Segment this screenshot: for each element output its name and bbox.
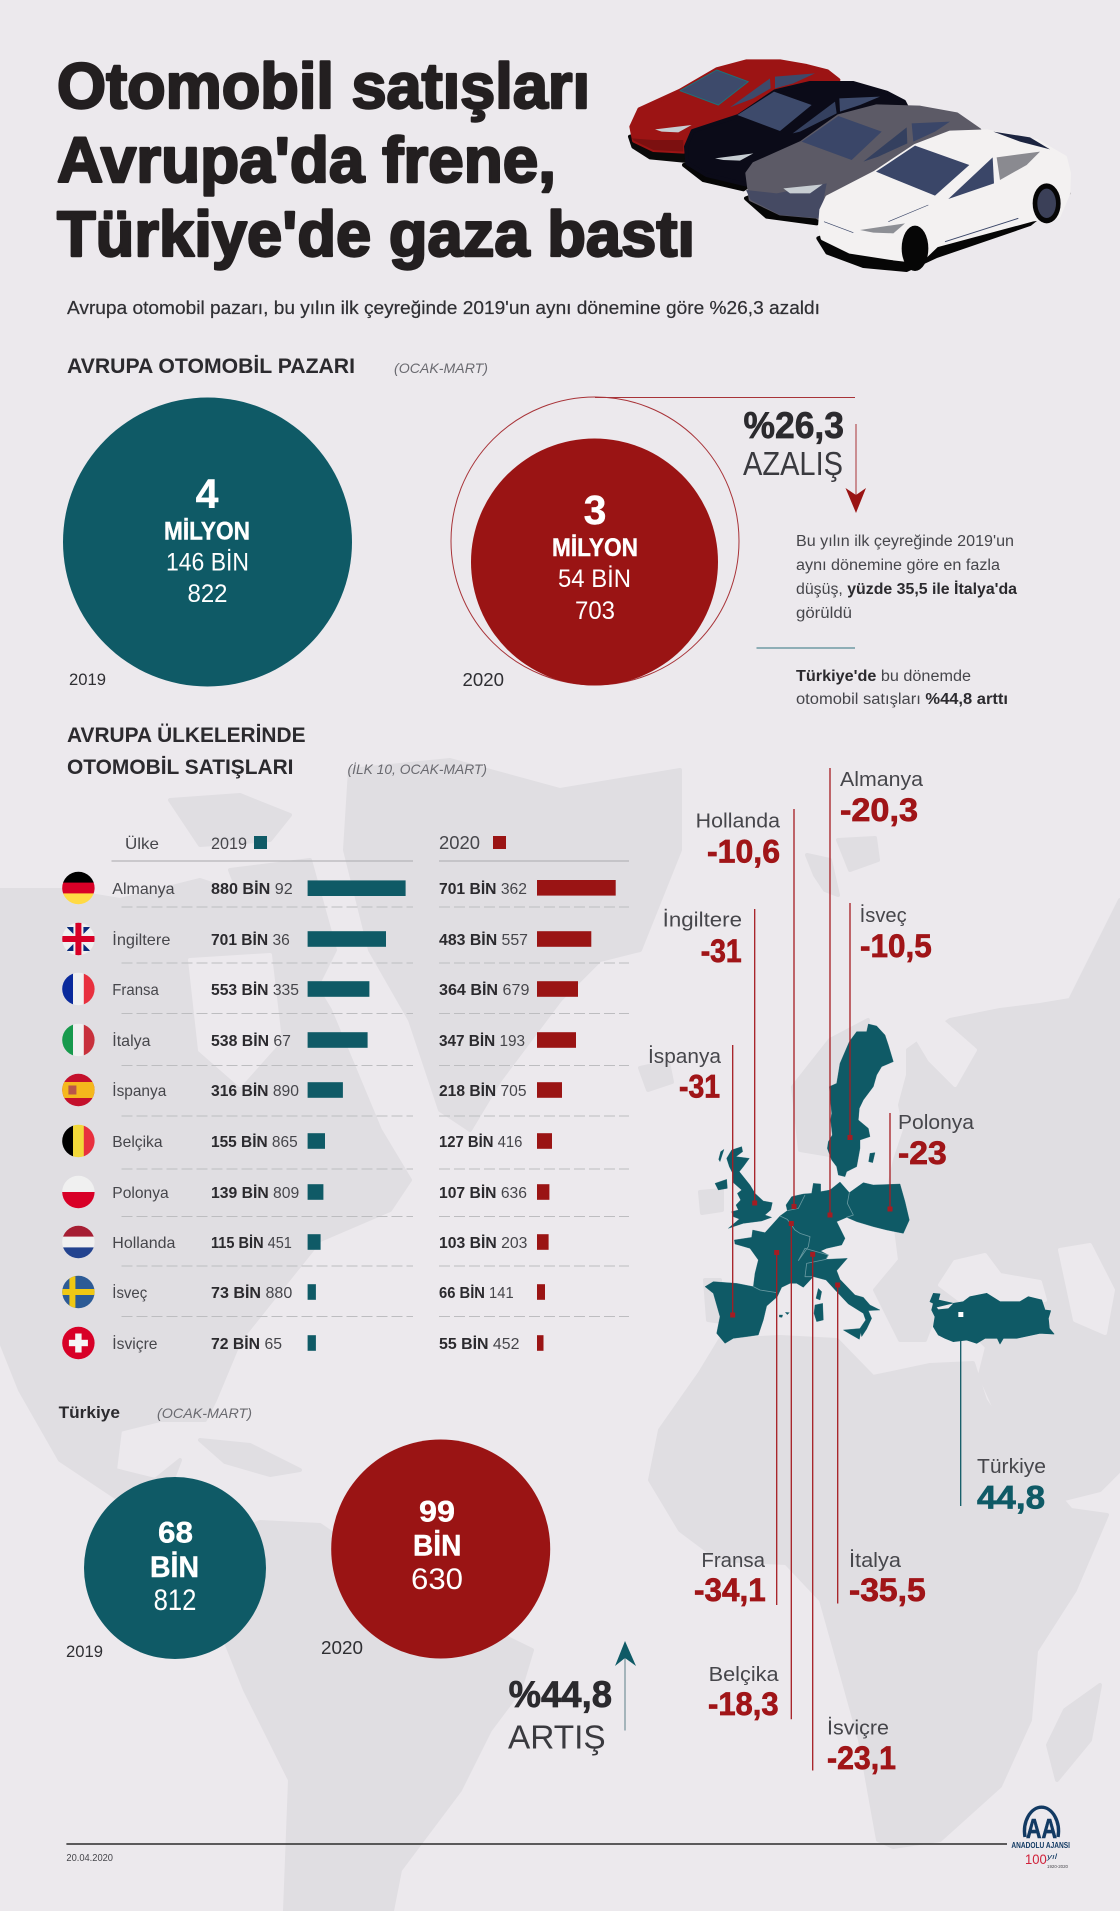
- leader: İngiltere: [752, 909, 757, 1206]
- text block: largest drop: aynı dönemine göre en fazla: [796, 557, 1000, 574]
- row: Fransa: 553 BİN 335: [211, 981, 299, 999]
- table header: 2019: [211, 834, 247, 853]
- heading: European car market: (OCAK-MART): [394, 360, 488, 376]
- callout: 44,8 percent increase: [508, 1674, 612, 1755]
- heading: car sales in European countries: (İLK 10, OCAK-MART): [348, 761, 487, 777]
- text block: largest drop: görüldü: [796, 605, 852, 622]
- icon: flag of Germany: [61, 871, 95, 905]
- circle: Europe 2019: 4: [196, 470, 219, 516]
- text block: largest drop: düşüş, yüzde 35,5 ile İtalya'da: [796, 581, 1017, 598]
- leader: İsveç: [848, 903, 852, 1140]
- map label: Almanya: Almanya: [840, 769, 924, 791]
- row: İspanya: 316 BİN 890: [211, 1082, 299, 1100]
- leader: Almanya: [828, 768, 832, 1218]
- logo: Anadolu Ajansı: ANADOLU AJANSI: [1011, 1840, 1070, 1850]
- map label: İtalya: İtalya: [849, 1549, 902, 1572]
- circle: Türkiye 2020: 630: [411, 1563, 463, 1596]
- leader: Hollanda: [792, 809, 796, 1209]
- row: Hollanda: [61, 1225, 549, 1259]
- label: 2020: 2020: [321, 1638, 363, 1658]
- row: İngiltere: 701 BİN 36: [211, 931, 290, 949]
- leader: Türkiye: [960, 1340, 962, 1506]
- callout: 26,3 percent decrease: AZALIŞ: [743, 445, 843, 482]
- callout: 44,8 percent increase: %44,8: [509, 1674, 612, 1715]
- map label: İtalya: [849, 1549, 926, 1608]
- row: İtalya: [61, 1023, 576, 1057]
- circle: Türkiye 2019: BİN: [150, 1551, 199, 1584]
- map label: Belçika: Belçika: [709, 1664, 780, 1686]
- icon: flag of the United Kingdom: [61, 922, 95, 956]
- map label: Fransa: Fransa: [701, 1550, 766, 1572]
- text block: largest drop: Bu yılın ilk çeyreğinde 2019'un: [796, 533, 1014, 550]
- map label: Türkiye: [977, 1456, 1046, 1516]
- map label: Polonya: -23: [898, 1135, 947, 1171]
- row: Fransa: Fransa: [112, 982, 159, 999]
- circle: Europe 2020 with ring of 2019 size: 703: [575, 597, 615, 625]
- map label: Almanya: [840, 769, 924, 828]
- heading: Türkiye: (OCAK-MART): [157, 1405, 252, 1421]
- callout: 44,8 percent increase: ARTIŞ: [508, 1718, 606, 1755]
- map label: Fransa: [694, 1550, 766, 1608]
- map label: İsviçre: [827, 1716, 896, 1776]
- label: 2020: 2020: [462, 670, 504, 690]
- circle: Europe 2020 with ring of 2019 size: 3: [584, 487, 606, 533]
- row: Fransa: 364 BİN 679: [439, 981, 530, 999]
- icon: flag of Belgium: [61, 1124, 96, 1158]
- row: İspanya: 218 BİN 705: [439, 1082, 527, 1100]
- row: İsviçre: İsviçre: [112, 1334, 158, 1353]
- row: İspanya: [61, 1073, 562, 1107]
- map label: Polonya: Polonya: [898, 1112, 975, 1134]
- heading: car sales in European countries: AVRUPA ÜLKELERİNDE: [67, 724, 306, 747]
- row: İngiltere: 483 BİN 557: [439, 931, 528, 949]
- map label: İspanya: [648, 1045, 722, 1105]
- footer rule and date: 20.04.2020: [66, 1853, 113, 1864]
- icon: flag of Sweden: [61, 1275, 95, 1309]
- circle: Europe 2020 with ring of 2019 size: [451, 397, 739, 686]
- leader lines: countries: [730, 768, 892, 1770]
- row: Polonya: 107 BİN 636: [439, 1184, 527, 1202]
- map label: Hollanda: -10,6: [707, 834, 780, 870]
- map label: İngiltere: [663, 909, 742, 969]
- row: İtalya: İtalya: [112, 1031, 151, 1050]
- label: 2019: 2019: [66, 1642, 103, 1661]
- row: Polonya: Polonya: [112, 1185, 169, 1202]
- circle: Europe 2019: 146 BİN: [166, 548, 249, 576]
- circle: Türkiye 2019: 812: [154, 1584, 196, 1617]
- title: Otomobil satışları: [57, 50, 590, 122]
- circle: Türkiye 2019: 68: [158, 1516, 193, 1550]
- title: Türkiye'de gaza bastı: [57, 198, 695, 270]
- row: İsveç: 66 BİN 141: [439, 1284, 514, 1302]
- circle: Europe 2020 with ring of 2019 size: MİLYON: [552, 534, 638, 562]
- circle: Türkiye 2020: 99: [419, 1496, 455, 1528]
- row: Hollanda: 103 BİN 203: [439, 1234, 527, 1252]
- leader: İsviçre: [810, 1252, 815, 1770]
- row: Polonya: [61, 1175, 549, 1209]
- map label: İspanya: -31: [679, 1069, 720, 1105]
- label: 2019: 2019: [69, 670, 106, 689]
- row: Almanya: [61, 871, 616, 905]
- leader: İspanya: [730, 1045, 735, 1318]
- map label: İtalya: -35,5: [849, 1572, 926, 1608]
- logo: Anadolu Ajansı: AA: [1026, 1813, 1057, 1844]
- leader: Belçika: [789, 1221, 794, 1719]
- row: İspanya: İspanya: [112, 1081, 166, 1100]
- row: Hollanda: 115 BİN 451: [211, 1234, 292, 1252]
- circle: Europe 2019: [63, 398, 352, 686]
- row: Belçika: Belçika: [112, 1134, 163, 1151]
- United Kingdom: [715, 1147, 772, 1228]
- row: Hollanda: Hollanda: [112, 1235, 176, 1252]
- leader: Polonya: [888, 1113, 892, 1212]
- map label: Fransa: -34,1: [694, 1572, 766, 1608]
- leader: İtalya: [835, 1282, 840, 1604]
- mainland: Germany, Poland, Netherlands, Belgium, France, Spain, Switzerland, Italy: [705, 1182, 909, 1343]
- circle: Türkiye 2019: [84, 1477, 266, 1659]
- icon: flag of the Netherlands: [61, 1225, 95, 1259]
- map label: İngiltere: -31: [701, 933, 742, 969]
- red car: [630, 61, 838, 161]
- row: İtalya: 347 BİN 193: [439, 1032, 525, 1050]
- heading: car sales in European countries: OTOMOBİL SATIŞLARI: [67, 756, 294, 779]
- row: İtalya: 538 BİN 67: [211, 1032, 291, 1050]
- text block: Turkey increase: otomobil satışları %44,8 arttı: [796, 691, 1008, 708]
- arrow: decrease: [595, 398, 866, 513]
- heading: car sales in European countries: [67, 724, 487, 779]
- row: İsviçre: 72 BİN 65: [211, 1335, 282, 1353]
- table header: 2020: [439, 833, 480, 853]
- icon: flag of Spain: [61, 1073, 95, 1107]
- row: Belçika: 127 BİN 416: [439, 1133, 522, 1151]
- illustration: four cars: [630, 61, 1069, 271]
- row: Polonya: 139 BİN 809: [211, 1184, 299, 1202]
- map label: İsveç: İsveç: [860, 904, 907, 927]
- row: İsviçre: [61, 1326, 544, 1360]
- map label: Türkiye: 44,8: [977, 1480, 1045, 1516]
- map label: İngiltere: İngiltere: [663, 909, 742, 932]
- arrow: increase: [615, 1641, 636, 1730]
- logo: Anadolu Ajansı: yıl: [1046, 1854, 1058, 1861]
- map label: İsviçre: İsviçre: [827, 1716, 889, 1740]
- map label: İsveç: [860, 904, 932, 964]
- row: İsveç: [61, 1275, 545, 1309]
- subtitle: Avrupa otomobil pazarı, bu yılın ilk çeyreğinde 2019'un aynı dönemine göre %26,3 azaldı: [67, 298, 820, 318]
- map label: Belçika: -18,3: [708, 1686, 779, 1722]
- row: İsviçre: 55 BİN 452: [439, 1335, 520, 1353]
- row: İsveç: 73 BİN 880: [211, 1284, 292, 1302]
- callout: 26,3 percent decrease: %26,3: [744, 405, 844, 446]
- circle: Europe 2019: 822: [188, 580, 228, 608]
- logo: Anadolu Ajansı: 1920-2020: [1047, 1864, 1068, 1869]
- heading: European car market: AVRUPA OTOMOBİL PAZARI: [67, 355, 355, 378]
- logo: Anadolu Ajansı: [1011, 1807, 1070, 1869]
- map label: İsveç: -10,5: [860, 928, 932, 964]
- circle: Türkiye 2020: [331, 1440, 550, 1658]
- icon: flag of Poland: [61, 1175, 95, 1209]
- table header: Ülke: [125, 835, 159, 853]
- circle: Türkiye 2020: BİN: [413, 1529, 461, 1562]
- heading: Türkiye: [59, 1403, 252, 1422]
- title: [57, 50, 695, 270]
- row: Belçika: 155 BİN 865: [211, 1133, 298, 1151]
- map label: İspanya: İspanya: [648, 1045, 722, 1068]
- map label: Hollanda: Hollanda: [696, 811, 781, 833]
- text block: Turkey increase: [796, 668, 1008, 708]
- row: İngiltere: [61, 922, 591, 956]
- icon: flag of Italy: [61, 1023, 96, 1057]
- row: Belçika: [61, 1124, 552, 1158]
- row: İsveç: İsveç: [112, 1283, 147, 1302]
- map label: Türkiye: Türkiye: [977, 1456, 1046, 1478]
- map: highlighted European countries: [705, 1024, 909, 1343]
- row: Almanya: Almanya: [112, 881, 175, 898]
- icon: flag of Switzerland: [61, 1326, 95, 1360]
- circle: Europe 2019: MİLYON: [164, 518, 250, 546]
- white car: [818, 131, 1069, 271]
- text block: Turkey increase: Türkiye'de bu dönemde: [796, 668, 971, 685]
- heading: European car market: [67, 355, 488, 378]
- row: Almanya: 880 BİN 92: [211, 880, 293, 898]
- map label: Belçika: [708, 1664, 780, 1722]
- logo: Anadolu Ajansı: 100: [1025, 1851, 1047, 1867]
- gray car: [746, 106, 987, 223]
- Sweden: [827, 1024, 893, 1177]
- black car: [684, 83, 920, 189]
- row: Fransa: [61, 972, 578, 1006]
- map: Turkey: [930, 1293, 1054, 1344]
- icon: flag of France: [61, 972, 96, 1006]
- text block: largest drop: [796, 533, 1017, 622]
- map label: İsviçre: -23,1: [827, 1740, 896, 1776]
- circle: Europe 2020 with ring of 2019 size: 54 BİN: [558, 564, 631, 593]
- callout: 26,3 percent decrease: [743, 405, 844, 482]
- leader: Fransa: [774, 1250, 779, 1605]
- heading: Türkiye: Türkiye: [59, 1403, 120, 1422]
- row: İngiltere: İngiltere: [112, 930, 171, 949]
- title: Avrupa'da frene,: [57, 124, 556, 196]
- world map background: [0, 760, 1120, 1911]
- map label: Almanya: -20,3: [840, 792, 918, 828]
- table header: [125, 833, 506, 853]
- row: Almanya: 701 BİN 362: [439, 880, 527, 898]
- map label: Polonya: [898, 1112, 975, 1171]
- map label: Hollanda: [696, 811, 781, 870]
